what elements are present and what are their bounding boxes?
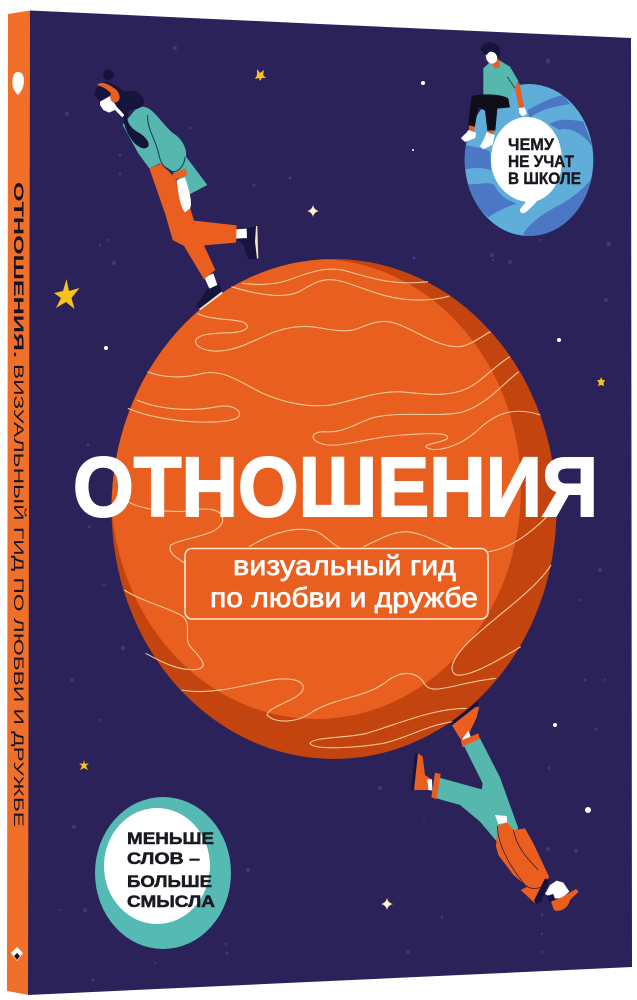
- subtitle box: [185, 548, 488, 619]
- orange planet: [111, 259, 556, 759]
- socks: [469, 125, 475, 132]
- boy sitting on blue planet: [461, 42, 527, 149]
- legs and shoes: [149, 163, 258, 310]
- hand: [495, 815, 507, 824]
- boy upside down: [411, 702, 579, 911]
- star small top: [255, 69, 266, 81]
- badge text: СМЫСЛА: [127, 892, 215, 911]
- torso: [483, 61, 519, 97]
- planet bottom contour loop: [310, 708, 467, 748]
- arm: [514, 83, 524, 108]
- collar: [534, 878, 549, 904]
- jacket: [496, 822, 549, 903]
- shoe top: [452, 707, 479, 739]
- spine logo: publisher: [11, 947, 23, 961]
- badge text: БОЛЬШЕ: [127, 872, 212, 891]
- speech bubble: [491, 117, 562, 213]
- head: [545, 881, 569, 898]
- badge text: СЛОВ –: [127, 849, 200, 868]
- cuff top: [461, 733, 480, 747]
- planet contour lines: [124, 269, 556, 721]
- coat: [123, 107, 207, 212]
- collar: [490, 59, 500, 68]
- cap: [551, 889, 579, 911]
- shoe left: [414, 753, 432, 790]
- badge text: [508, 135, 581, 188]
- blue planet badge: [462, 84, 594, 240]
- foot shadow left: [411, 753, 418, 790]
- spine subtitle: ВИЗУАЛЬНЫЙ ГИД ПО ЛЮБВИ И ДРУЖБЕ: [11, 364, 28, 827]
- star small left bottom: [79, 760, 89, 770]
- spine title: ОТНОШЕНИЯ.: [11, 182, 27, 358]
- hair: [481, 42, 500, 59]
- shoes: [461, 130, 476, 142]
- badge text: ЧЕМУ: [508, 135, 554, 154]
- hand: [519, 107, 527, 116]
- badge text: В ШКОЛЕ: [508, 169, 581, 188]
- badge text: МЕНЬШЕ: [127, 829, 214, 848]
- main title: ОТНОШЕНИЯ: [73, 440, 598, 534]
- white circle: [104, 808, 210, 924]
- star small right: [597, 377, 605, 386]
- star large: [54, 279, 80, 309]
- subtitle line 1: визуальный гид: [233, 550, 456, 581]
- cuff left: [431, 773, 441, 799]
- subtitle line 2: по любви и дружбе: [210, 582, 478, 613]
- spine logo: balloon: [12, 72, 24, 95]
- sparkle star bottom: [381, 898, 393, 910]
- face: [486, 46, 498, 64]
- trousers: [437, 738, 518, 843]
- book spine: [7, 10, 30, 995]
- yellow stars: [54, 69, 605, 910]
- girl with headphones: [94, 70, 258, 310]
- head and hair: [94, 70, 149, 148]
- teal badge: [95, 797, 231, 949]
- foot shadow top: [450, 702, 479, 725]
- trousers: [468, 94, 510, 131]
- sparkle star: [307, 205, 319, 217]
- badge text: НЕ УЧАТ: [508, 152, 575, 171]
- white star dots: [104, 81, 591, 813]
- badge text: [127, 829, 215, 911]
